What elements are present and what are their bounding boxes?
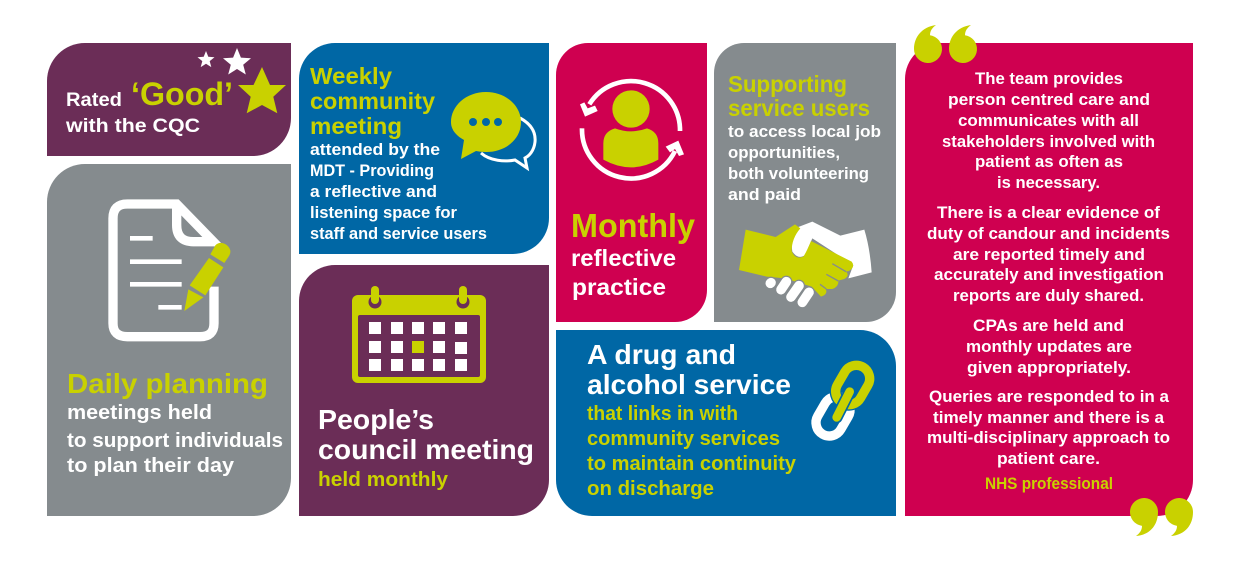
text: people's council meeting: held monthly [318,469,449,491]
heading: rated good: ‘Good’ [131,76,233,112]
icon: handshake [739,222,872,302]
text: testimonial: NHS professional [985,475,1113,493]
heading: rated good: Rated [66,90,122,111]
text: drug and alcohol service: alcohol service [587,369,791,400]
text: weekly community meeting: a reflective and [310,182,437,201]
text: testimonial: The team provides [975,70,1123,88]
text: monthly reflective practice: practice [572,274,666,300]
text: testimonial: multi-disciplinary approach to [927,429,1170,447]
text: testimonial: given appropriately. [967,359,1131,377]
text: monthly reflective practice: reflective [571,245,676,271]
icon: chain link [811,360,875,441]
text: testimonial: monthly updates are [966,338,1132,356]
panel: testimonial quote [905,25,1193,536]
text: testimonial: patient care. [997,450,1100,468]
text: testimonial [927,70,1170,493]
text: supporting service users: and paid [728,185,801,204]
text: drug and alcohol service: to maintain continuity [587,453,797,475]
text: testimonial: timely manner and there is a [933,409,1165,427]
text: drug and alcohol service [587,339,797,500]
text: people's council meeting: council meeting [318,434,534,465]
text: weekly community meeting: attended by the [310,140,440,159]
text: testimonial: reports are duly shared. [953,287,1144,305]
panel: weekly community meeting [299,43,549,254]
text: testimonial: person centred care and [948,91,1150,109]
icon: person with arrows [580,81,684,178]
text: testimonial: duty of candour and incidents [927,225,1170,243]
panel: daily planning [47,164,291,516]
text: people's council meeting: People’s [318,404,434,435]
text: weekly community meeting: MDT - Providing [310,161,434,180]
heading: rated good [65,76,233,137]
text: daily planning: to plan their day [67,455,235,477]
text: testimonial: patient as often as [975,153,1123,171]
text: weekly community meeting: staff and service users [310,224,487,243]
text: weekly community meeting: Weekly [310,63,392,89]
text: testimonial: communicates with all [958,112,1139,130]
text: supporting service users: both volunteering [728,164,869,183]
text: weekly community meeting: community [310,88,435,114]
panel: people's council meeting [299,265,549,516]
text: daily planning: meetings held [67,402,212,424]
text: testimonial: is necessary. [997,174,1100,192]
text: monthly reflective practice [571,207,696,300]
text: monthly reflective practice: Monthly [571,207,696,244]
text: testimonial: There is a clear evidence of [937,204,1161,222]
text: testimonial: are reported timely and [953,246,1145,264]
icon: calendar [352,286,486,383]
text: daily planning [67,368,283,477]
text: supporting service users: service users [728,95,870,121]
icon: stars [198,48,286,113]
text: supporting service users: to access local job [728,122,881,141]
panel: supporting service users [714,43,896,322]
text: testimonial: CPAs are held and [973,317,1124,335]
text: drug and alcohol service: A drug and [587,339,736,370]
icon: speech bubbles [451,92,535,168]
text: weekly community meeting: listening space for [310,203,457,222]
text: weekly community meeting [310,63,487,243]
text: drug and alcohol service: that links in with [587,403,738,425]
text: testimonial: Queries are responded to in a [929,388,1170,406]
text: supporting service users: opportunities, [728,143,840,162]
icon: opening quote marks [914,25,977,63]
panel: monthly reflective practice [556,43,707,322]
panel: rated good [47,43,291,156]
text: drug and alcohol service: community services [587,428,780,450]
text: supporting service users: Supporting [728,71,847,97]
icon: closing quote marks [1130,498,1193,536]
text: daily planning: to support individuals [67,430,283,452]
text: testimonial: accurately and investigation [934,266,1164,284]
panel: drug and alcohol service [556,330,896,516]
icon: document and pencil [113,204,230,337]
text: supporting service users [728,71,881,204]
text: drug and alcohol service: on discharge [587,478,714,500]
text: testimonial: stakeholders involved with [942,133,1155,151]
heading: rated good: with the CQC [65,116,200,137]
text: weekly community meeting: meeting [310,113,402,139]
text: people's council meeting [318,404,534,491]
text: daily planning: Daily planning [67,368,268,399]
